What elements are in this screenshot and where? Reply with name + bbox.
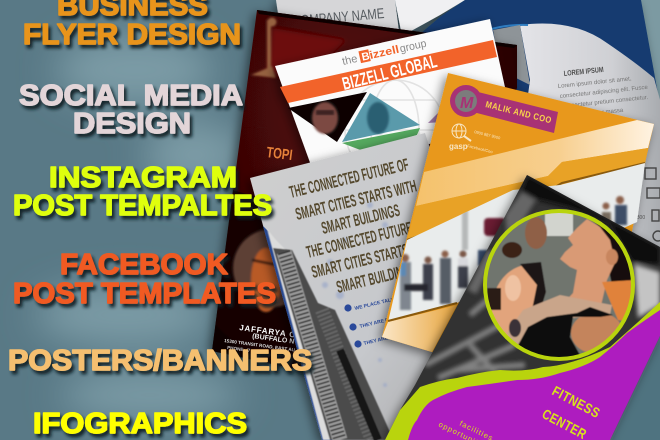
text: company name: COMPANY NAME	[292, 6, 385, 30]
text: contact lines: gasp	[449, 142, 468, 151]
triangle photo: woman	[342, 93, 420, 142]
heading: connected future text: THE CONNECTED FUTURE OF	[287, 155, 411, 202]
lower pale ribbon	[382, 305, 457, 352]
globe wire pattern	[344, 79, 440, 152]
purple wave	[408, 310, 660, 440]
brochure blue header	[420, 0, 660, 130]
heading: connected future text: THE CONNECTED FUTURE OF	[304, 215, 428, 262]
text: FITNESS CENTER	[540, 383, 603, 440]
text: logo the Bizzell group: group	[399, 38, 428, 55]
blurred gym backdrop	[425, 175, 660, 378]
heading: connected future text: SMART CITIES STARTS WITH	[293, 176, 419, 224]
red top shape	[268, 28, 345, 85]
lime wave	[385, 302, 660, 440]
ink splatter	[322, 202, 388, 387]
green strip	[342, 128, 420, 151]
text: lorem ipsum body: consectetur pretium consectetur.	[562, 95, 649, 110]
triangle photo: man	[288, 92, 367, 142]
pale ribbon	[416, 120, 654, 206]
text: contact lines: 0900 887 9000	[474, 129, 502, 141]
text: logo the Bizzell group: izzell	[368, 44, 400, 62]
icons: contact squares	[645, 168, 660, 241]
text: contact lines	[449, 129, 502, 154]
logo: Malik and Coo badge	[450, 85, 558, 133]
gold band	[407, 148, 648, 240]
panel: fitness center flyer	[385, 175, 660, 440]
brochure gray page	[500, 23, 660, 300]
text: lorem ipsum body: Nullam semper massa	[564, 108, 624, 120]
heading: Social Media Design	[19, 80, 243, 140]
heading: Instagram Post Templates: POST TEMPALTES	[13, 190, 272, 222]
text: logo the Bizzell group	[341, 37, 428, 68]
man	[525, 217, 547, 249]
orange band	[280, 40, 497, 103]
blue flyer edge	[263, 226, 333, 440]
heading: Business Flyer Design: FLYER DESIGN	[23, 19, 241, 51]
photo: business team	[388, 163, 645, 322]
blue swoosh	[478, 25, 528, 34]
text: logo the Bizzell group: the	[341, 53, 359, 68]
brown rule	[407, 163, 645, 240]
text: topic: TOPI	[266, 144, 293, 164]
brochure left panel	[276, 0, 400, 40]
heading: connected future text: SMART BUILDINGS	[319, 201, 402, 238]
heading: Facebook Post Templates: POST TEMPLATES	[13, 278, 276, 310]
panel: corporate brochure (back layer)	[276, 0, 660, 300]
bullet list	[344, 290, 423, 348]
heading: Social Media Design: SOCIAL MEDIA	[19, 80, 243, 112]
heading: Instagram Post Templates	[13, 162, 272, 222]
text: lorem ipsum body: Lorem ipsum dolor sit amet,	[558, 76, 632, 90]
text: lorem ipsum body	[558, 76, 649, 120]
text: phone: PHONE: (7	[227, 345, 251, 353]
bullet list: WE PLACE TALL BUILDINGS	[354, 290, 423, 312]
panel: Bizzell Global flyer	[268, 18, 505, 164]
heading: Business Flyer Design	[23, 0, 241, 51]
heading: Facebook Post Templates: FACEBOOK	[60, 249, 228, 281]
heading: Facebook Post Templates	[13, 249, 276, 310]
icon: globe search	[452, 124, 471, 141]
text: logo the Bizzell group: B	[361, 50, 371, 64]
portrait speaker	[233, 229, 311, 312]
text: lorem ipsum body: consectetur adipiscing elit. Fusce	[560, 85, 649, 100]
woman	[560, 218, 616, 304]
text: lorem ipsum heading: LOREM IPSUM	[563, 65, 604, 78]
heading: connected future text	[287, 155, 435, 297]
heading: connected future text: SMART CITIES STARTS WITH	[309, 234, 435, 282]
icon: dagger ornament	[251, 18, 276, 78]
text: address: 15300 TRANSIT ROAD, EAST AU	[224, 338, 296, 353]
heading: Instagram Post Templates: INSTAGRAM	[49, 162, 237, 194]
bullet list: THEY ARE PART OF	[363, 330, 411, 347]
bullet list: THEY ARE PART OF	[359, 313, 407, 330]
panel: dark red event flyer	[212, 10, 517, 400]
panel: Malik and Coo orange flyer	[380, 73, 654, 400]
text: FITNESS CENTER: FITNESS	[550, 383, 603, 421]
icon: skyscraper photo	[267, 229, 392, 440]
heading: Social Media Design: DESIGN	[73, 108, 191, 140]
text: speaker name: JAFFARYA C	[239, 323, 296, 340]
heading: connected future text: SMART BUILDINGS	[334, 260, 417, 297]
circle photo: athlete	[483, 209, 635, 361]
text: BIZZELL GLOBAL: BIZZELL GLOBAL	[340, 51, 439, 94]
text: phone digits: 0800	[634, 215, 645, 221]
logo: Malik and Coo badge: MALIK AND COO	[485, 99, 553, 125]
heading: Infographics: IFOGRAPHICS	[33, 408, 247, 440]
purple triangle	[428, 109, 442, 123]
text: contact lines: Facebook/Coo	[467, 143, 494, 154]
lower black fade	[212, 190, 310, 372]
heading: Posters/Banners: POSTERS/BANNERS	[8, 345, 312, 377]
panel: smart cities gray flyer	[250, 133, 480, 440]
logo: Malik and Coo badge: M	[460, 95, 474, 112]
text: venue: (BUFFALO N	[252, 333, 295, 346]
